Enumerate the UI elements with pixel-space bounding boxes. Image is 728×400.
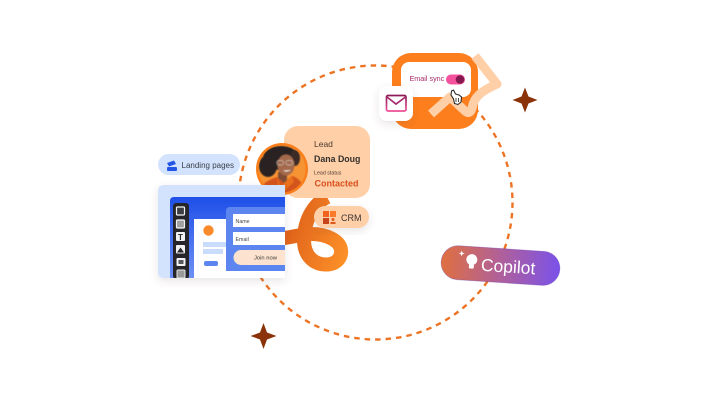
orange ribbon loop [284,197,341,264]
signup form: Join now [254,256,278,262]
CRM label: CRM [341,213,362,223]
landing pages pill [158,154,240,175]
email sync label: Email sync [410,74,445,83]
blue editor area [170,197,285,278]
hair [263,146,299,170]
signup form: Name [236,219,250,225]
icon: hand cursor [451,90,462,104]
icon: light bulb [466,254,478,269]
lead status value: Contacted [314,178,359,188]
toggle [446,74,465,84]
dashed orbit circle [238,66,512,340]
signup form: Email [236,237,249,243]
icon: CRM grid [323,211,336,224]
white sync panel [401,62,471,97]
signup form [226,207,285,271]
lead label: Lead [314,139,333,149]
icon: landing pages [167,160,177,171]
Copilot badge [440,245,561,286]
panel: landing page builder [158,185,285,279]
white page preview [194,219,285,278]
shirt [264,176,302,192]
Copilot label: Copilot [480,255,536,278]
avatar portrait [256,143,308,195]
icon: mail tile [379,86,413,121]
card background [392,53,478,129]
icon: sparkle [459,250,465,257]
lead name: Dana Doug [314,154,360,164]
toolbar: T [178,233,183,242]
star: lower left [250,323,276,349]
smile [283,170,291,172]
star: upper right [512,88,538,112]
landing pages label: Landing pages [182,161,234,170]
lead status label: Lead status [314,170,342,176]
email sync card [392,53,497,129]
glasses [277,160,284,165]
peach ribbon [431,56,497,114]
CRM pill [314,206,369,228]
neck [278,172,287,183]
face [278,154,294,176]
panel: lead card [284,126,370,198]
